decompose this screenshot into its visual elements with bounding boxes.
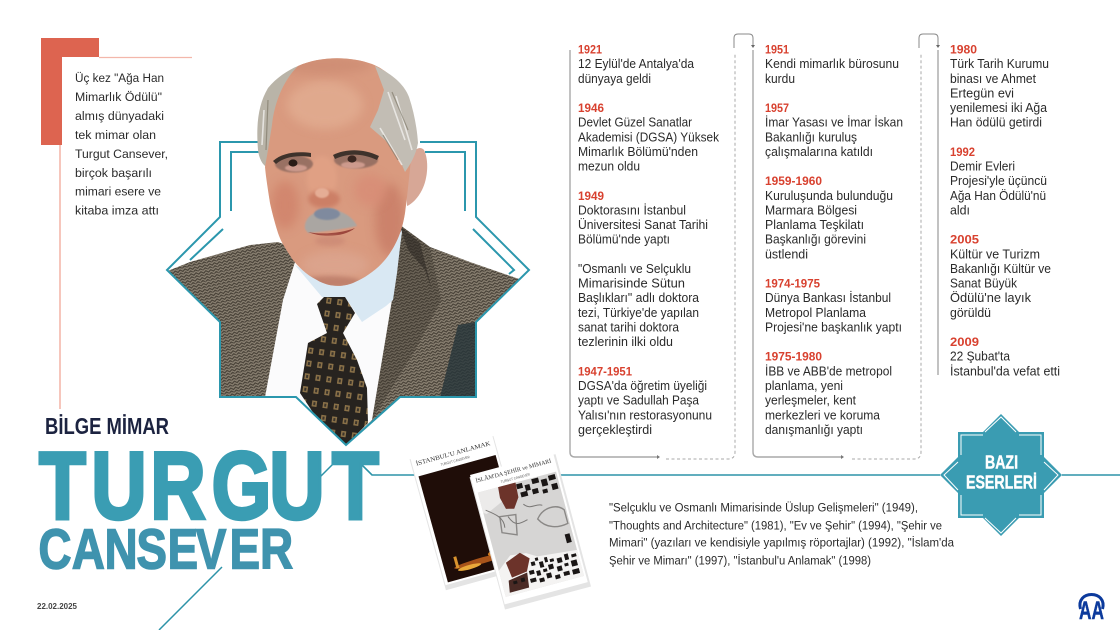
- entry 1947-1951: gerçekleştirdi: [578, 423, 652, 437]
- book: Istanbul'u Anlamak: [409, 434, 530, 590]
- hair shadows: [266, 92, 408, 160]
- entry 2009: İstanbul'da vefat etti: [950, 364, 1060, 378]
- entry 1946: [578, 101, 720, 174]
- entry 2009: 2009: [950, 335, 979, 349]
- entry 1947-1951: yaptı ve Sadullah Paşa: [578, 394, 699, 408]
- entry 2005: görüldü: [950, 306, 991, 320]
- timeline column 3: [950, 42, 1060, 378]
- entry 2005: Kültür ve Turizm: [950, 247, 1040, 261]
- entry 2005: 2005: [950, 233, 979, 247]
- entry 1959-1960: [765, 174, 893, 261]
- entry 1949: [578, 189, 708, 247]
- entry 1921: 1921: [578, 42, 602, 56]
- entry 1980: binası ve Ahmet: [950, 72, 1036, 86]
- entry 1959-1960: Planlama Teşkilatı: [765, 218, 864, 232]
- star frame inner lines: [190, 152, 514, 274]
- entry 1946: Akademisi (DGSA) Yüksek: [578, 130, 720, 144]
- intro text block: birçok başarılı: [75, 166, 152, 180]
- entry doctoral thesis: tezi, Türkiye'de yapılan: [578, 306, 699, 320]
- entry 1992: [950, 145, 1047, 217]
- entry 1992: Projesi'yle üçüncü: [950, 174, 1047, 188]
- entry 2005: Bakanlığı Kültür ve: [950, 262, 1051, 276]
- hair strands: [262, 92, 412, 165]
- entry 1951: Kendi mimarlık bürosunu: [765, 57, 899, 71]
- entry 1975-1980: yerleşmeler, kent: [765, 394, 856, 408]
- entry 1946: mezun oldu: [578, 160, 640, 174]
- badge: Bazı Eserleri: BAZI: [985, 452, 1018, 472]
- entry 1992: aldı: [950, 203, 970, 217]
- intro text block: kitaba imza attı: [75, 204, 159, 218]
- entry 1951: kurdu: [765, 72, 795, 86]
- right hair: [370, 66, 418, 172]
- entry 1975-1980: planlama, yeni: [765, 379, 843, 393]
- intro text block: Üç kez "Ağa Han: [75, 71, 164, 85]
- entry 1947-1951: DGSA'da öğretim üyeliği: [578, 379, 707, 393]
- entry 1949: Doktorasını İstanbul: [578, 203, 686, 217]
- star frame outline: [167, 142, 529, 445]
- jacket, shirt and tie: [165, 225, 522, 447]
- entry 1946: Devlet Güzel Sanatlar: [578, 116, 692, 130]
- horizontal teal divider: [362, 465, 1120, 475]
- entry 1951: 1951: [765, 42, 789, 56]
- entry 2009: [950, 335, 1060, 378]
- entry 2005: Ödülü'ne layık: [950, 291, 1032, 305]
- entry 1951: [765, 42, 899, 86]
- entry doctoral thesis: "Osmanlı ve Selçuklu: [578, 262, 691, 276]
- head: [255, 50, 427, 295]
- intro text block: Turgut Cansever,: [75, 147, 168, 161]
- timeline connector 1: [570, 34, 940, 459]
- entry 1975-1980: [765, 350, 892, 437]
- book: Istanbul'u Anlamak: TURGUT CANSEVER: [440, 455, 471, 467]
- book: Islam'da Sehir ve Mimari: TURGUT CANSEVER: [500, 472, 531, 484]
- intro text block: [75, 71, 168, 218]
- intro text block: tek mimar olan: [75, 128, 156, 142]
- entry 1957: Bakanlığı kuruluş: [765, 130, 857, 144]
- red corner block with pink frame lines: [41, 38, 192, 409]
- entry 1959-1960: Başkanlığı görevini: [765, 233, 866, 247]
- entry 1974-1975: [765, 277, 902, 334]
- badge: Bazı Eserleri: ESERLERİ: [966, 472, 1037, 492]
- logo: AA: [1079, 594, 1104, 625]
- entry 1974-1975: Projesi'ne başkanlık yaptı: [765, 320, 902, 334]
- eyebrows: [273, 152, 311, 164]
- entry 2005: Sanat Büyük: [950, 277, 1018, 291]
- entry 1974-1975: 1974-1975: [765, 277, 820, 291]
- entry 1980: 1980: [950, 42, 977, 56]
- works list text: "Selçuklu ve Osmanlı Mimarisinde Üslup Gelişmeleri" (1949),: [609, 501, 918, 515]
- entry 1921: dünyaya geldi: [578, 72, 651, 86]
- title: Turgut: TURGUT: [39, 432, 379, 539]
- works list text: Mimari" (yazıları ve kendisiyle yapılmış röportajlar) (1992), "İslam'da: [609, 536, 954, 550]
- entry 1947-1951: [578, 364, 712, 437]
- intro text block: almış dünyadaki: [75, 109, 164, 123]
- entry 1959-1960: Kuruluşunda bulunduğu: [765, 189, 893, 203]
- entry 1946: 1946: [578, 101, 604, 115]
- intro text block: mimari esere ve: [75, 184, 161, 198]
- entry 1975-1980: danışmanlığı yaptı: [765, 423, 863, 437]
- title: Cansever: CANSEVER: [38, 517, 293, 581]
- left hair: [257, 66, 298, 168]
- face: [265, 58, 410, 286]
- entry doctoral thesis: Başlıkları" adlı doktora: [578, 291, 699, 305]
- entry 1947-1951: Yalısı'nın restorasyonunu: [578, 408, 712, 422]
- entry 2009: 22 Şubat'ta: [950, 350, 1010, 364]
- entry 1949: Üniversitesi Sanat Tarihi: [578, 218, 708, 232]
- title: Bilge Mimar: BİLGE MİMAR: [45, 413, 169, 439]
- date: 22.02.2025: [37, 601, 77, 611]
- entry doctoral thesis: tezlerinin ilki oldu: [578, 335, 673, 349]
- entry 1957: çalışmalarına katıldı: [765, 145, 873, 159]
- entry 1957: 1957: [765, 101, 789, 115]
- works list text: Şehir ve Mimarı" (1997), "İstanbul'u Anlamak" (1998): [609, 553, 871, 567]
- book: Istanbul'u Anlamak: İSTANBUL'U ANLAMAK: [415, 440, 492, 467]
- entry 1921: [578, 42, 694, 86]
- entry 1949: Bölümü'nde yaptı: [578, 233, 670, 247]
- entry 1959-1960: 1959-1960: [765, 174, 822, 188]
- logo: AA: AA: [1079, 597, 1104, 625]
- book: Islam'da Sehir ve Mimari: İSLÂM'DA ŞEHİR ve MİMARİ: [475, 457, 552, 485]
- book covers: [409, 434, 591, 610]
- entry 1992: Demir Evleri: [950, 160, 1015, 174]
- mouth: [308, 228, 355, 236]
- entry 1946: Mimarlık Bölümü'nden: [578, 145, 698, 159]
- eye sockets: [275, 156, 313, 172]
- entry 2005: [950, 233, 1051, 320]
- timeline column 1: [578, 42, 720, 437]
- entry 1921: 12 Eylül'de Antalya'da: [578, 57, 694, 71]
- entry 1980: Türk Tarih Kurumu: [950, 57, 1049, 71]
- entry 1949: 1949: [578, 189, 604, 203]
- entry 1957: İmar Yasası ve İmar İskan: [765, 116, 903, 130]
- entry 1974-1975: Dünya Bankası İstanbul: [765, 291, 891, 305]
- diagonal accent lines: [159, 460, 337, 630]
- entry 1980: Han ödülü getirdi: [950, 116, 1042, 130]
- entry 1980: Ertegün evi: [950, 86, 1014, 100]
- entry 1959-1960: Marmara Bölgesi: [765, 203, 857, 217]
- entry 1947-1951: 1947-1951: [578, 364, 632, 378]
- intro text block: Mimarlık Ödülü": [75, 90, 162, 104]
- entry 1957: [765, 101, 903, 159]
- moustache: [305, 208, 357, 233]
- entry doctoral thesis: Mimarisinde Sütun: [578, 277, 685, 291]
- entry 1992: Ağa Han Ödülü'nü: [950, 189, 1046, 203]
- portrait with star frame: [165, 50, 529, 447]
- entry 1980: yenilemesi iki Ağa: [950, 101, 1047, 115]
- ear: [405, 148, 427, 206]
- entry 1975-1980: merkezleri ve koruma: [765, 408, 880, 422]
- entry doctoral thesis: [578, 262, 699, 349]
- works list text: [609, 501, 954, 567]
- entry 1975-1980: İBB ve ABB'de metropol: [765, 364, 892, 378]
- entry 1992: 1992: [950, 145, 975, 159]
- timeline column 2: [765, 42, 903, 437]
- entry doctoral thesis: sanat tarihi doktora: [578, 320, 679, 334]
- badge: Bazı Eserleri: [940, 414, 1062, 536]
- entry 1959-1960: üstlendi: [765, 247, 808, 261]
- entry 1974-1975: Metropol Planlama: [765, 306, 866, 320]
- book: Islam'da Sehir ve Mimari: [469, 452, 591, 610]
- eyes: [288, 159, 298, 167]
- entry 1980: [950, 42, 1049, 130]
- entry 1975-1980: 1975-1980: [765, 350, 822, 364]
- works list text: "Thoughts and Architecture" (1981), "Ev ve Şehir" (1994), "Şehir ve: [609, 518, 942, 532]
